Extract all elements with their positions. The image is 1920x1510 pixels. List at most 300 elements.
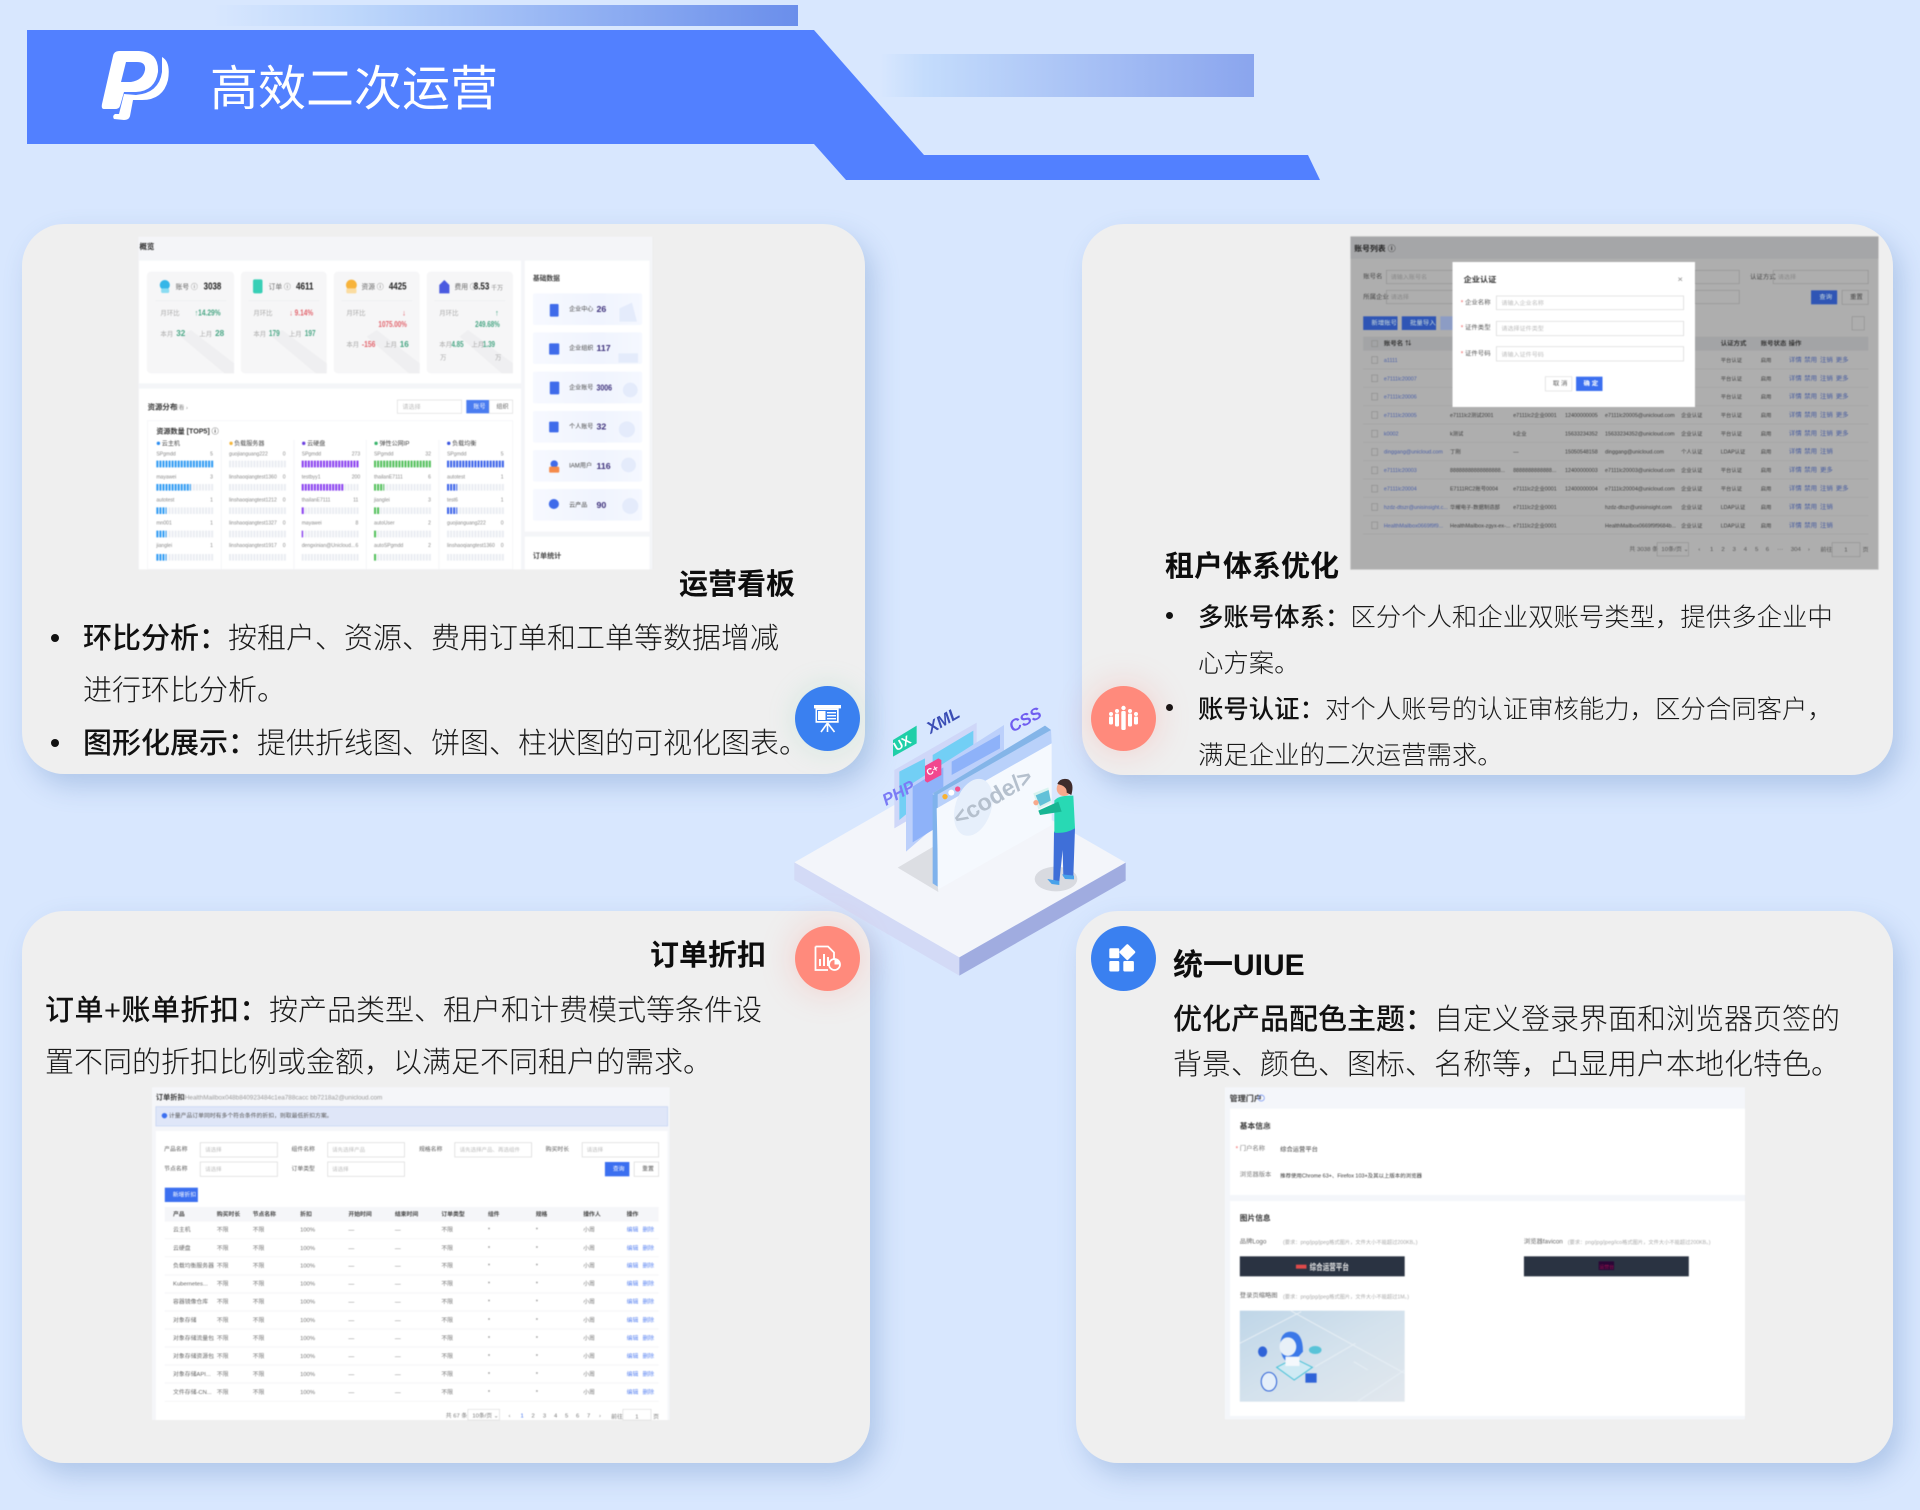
screenshot: order discount table: * — [488, 1282, 491, 1288]
screenshot: portal settings: (要求：png/jpg/jpeg/ico格式图片，文件大小不能超过200KB。) — [1568, 1238, 1711, 1246]
screenshot: dashboard overview: 2 — [428, 543, 431, 549]
screenshot: order discount table: 不限 — [217, 1316, 229, 1324]
screenshot: order discount table: — — [395, 1336, 401, 1342]
screenshot: order discount table: 编辑 — [627, 1336, 638, 1342]
screenshot: account list with modal: 账号名 — [1363, 273, 1382, 281]
screenshot: account list with modal: 企业认证 — [1464, 274, 1496, 284]
screenshot: order discount table: / HealthMailbox048b840923484c1ea788cacc bb7218a2@unicloud.com — [181, 1094, 382, 1101]
screenshot: account list with modal: e7111lc20007 — [1384, 376, 1417, 382]
screenshot: dashboard overview: 0 — [283, 520, 286, 526]
screenshot: order discount table: 前往 — [611, 1412, 623, 1420]
screenshot: dashboard overview: 费用 ⓘ — [454, 282, 477, 291]
screenshot: dashboard overview: 3 — [210, 475, 213, 481]
screenshot: dashboard overview: SPgmdd — [302, 451, 321, 457]
screenshot: account list with modal: e7111lc2企业0001 — [1513, 411, 1557, 419]
screenshot: order discount table: 不限 — [217, 1334, 229, 1342]
screenshot: order discount table: 4 — [554, 1413, 558, 1419]
screenshot: account list with modal: dinggang@unicloud.com — [1384, 450, 1443, 456]
screenshot: order discount table: 2 — [532, 1413, 535, 1419]
screenshot: account list with modal: › — [1808, 547, 1810, 553]
screenshot: order discount table: 不限 — [441, 1262, 453, 1270]
screenshot: portal settings: 浏览器favicon — [1524, 1237, 1563, 1245]
screenshot: dashboard overview: 资源 ⓘ — [362, 282, 384, 291]
screenshot: order discount table: * — [536, 1228, 539, 1234]
screenshot: order discount table: 不限 — [441, 1352, 453, 1360]
screenshot: portal settings: 登录页缩略图 — [1240, 1292, 1278, 1300]
screenshot: dashboard overview: 5 — [501, 451, 504, 457]
screenshot: account list with modal: 禁用 — [1804, 485, 1817, 492]
screenshot: account list with modal: 1 — [1844, 548, 1848, 554]
screenshot: portal settings: 推荐使用Chrome 63+、Firefox 103+及其以上版本的浏览器 — [1280, 1171, 1423, 1179]
screenshot: dashboard overview: 32 — [176, 329, 186, 338]
screenshot: dashboard overview: 0 — [501, 520, 504, 526]
screenshot: order discount table: — — [395, 1354, 401, 1360]
screenshot: account list with modal: 平台认证 — [1721, 356, 1742, 364]
screenshot: order discount table: 组件 — [488, 1210, 500, 1218]
screenshot: order discount table: 编辑 — [627, 1354, 638, 1360]
screenshot: order discount table: * — [488, 1354, 491, 1360]
text: 账号认证 line 1: 账号认证：对个人账号的认证审核能力，区分合同客户， — [1198, 696, 1833, 724]
screenshot: order discount table: * — [536, 1336, 539, 1342]
screenshot: dashboard overview: 本月 — [346, 340, 359, 349]
screenshot: account list with modal: 所属企业 — [1363, 293, 1389, 301]
screenshot: dashboard overview: IAM用户 — [569, 462, 592, 470]
screenshot: dashboard overview: 26 — [596, 304, 606, 314]
screenshot: dashboard overview: 订单 ⓘ — [269, 282, 291, 291]
screenshot: dashboard overview: 订单统计 — [533, 551, 561, 560]
screenshot: account list with modal: 新增账号 — [1371, 319, 1397, 327]
screenshot: dashboard overview: dengxinian@Unicloud... — [302, 543, 355, 549]
screenshot: order discount table: 100% — [300, 1264, 315, 1270]
screenshot: order discount table: 编辑 — [627, 1372, 638, 1378]
screenshot: account list with modal: 启用 — [1761, 356, 1771, 364]
screenshot: order discount table: 对象存储API... — [173, 1370, 211, 1378]
screenshot: dashboard overview — [139, 238, 652, 570]
screenshot: dashboard overview: 1 — [501, 475, 504, 481]
screenshot: order discount table: — — [348, 1372, 354, 1378]
screenshot: dashboard overview: 概览 — [139, 242, 155, 251]
screenshot: order discount table: 订单类型 — [292, 1165, 315, 1173]
screenshot: order discount table: 100% — [300, 1390, 315, 1396]
screenshot: order discount table: 请选择 — [332, 1165, 349, 1173]
screenshot: order discount table: 节点名称 — [164, 1165, 188, 1173]
screenshot: dashboard overview: jianglei — [155, 543, 172, 549]
screenshot: account list with modal: 查询 — [1819, 293, 1832, 301]
screenshot: order discount table: * — [536, 1390, 539, 1396]
screenshot: order discount table: 不限 — [441, 1388, 453, 1396]
screenshot: dashboard overview: 月环比 — [346, 308, 366, 317]
screenshot: dashboard overview: 197 — [305, 329, 316, 338]
screenshot: portal settings: 图片信息 — [1240, 1213, 1271, 1222]
screenshot: order discount table: * — [536, 1246, 539, 1252]
screenshot: dashboard overview: 月环比 — [439, 308, 458, 317]
screenshot: account list with modal: 请选择 — [1778, 273, 1796, 281]
screenshot: dashboard overview: ↑14.29% — [195, 309, 221, 318]
screenshot: account list with modal: * 证件类型 — [1461, 324, 1491, 331]
screenshot: order discount table: 不限 — [217, 1280, 229, 1288]
screenshot: dashboard overview: SPgmdd — [374, 451, 394, 457]
screenshot: account list with modal: 详情 — [1789, 448, 1802, 456]
icon: report document — [795, 926, 860, 991]
screenshot: order discount table: 查询 — [613, 1165, 625, 1173]
screenshot: order discount table: 不限 — [217, 1352, 229, 1360]
screenshot: account list with modal: ··· — [1777, 547, 1783, 553]
screenshot: account list with modal: 禁用 — [1804, 356, 1817, 364]
screenshot: dashboard overview: linshaoqiangtest1360 — [229, 475, 277, 481]
screenshot: dashboard overview: 116 — [596, 461, 611, 471]
screenshot: portal settings: 品牌Logo — [1240, 1237, 1267, 1245]
screenshot: dashboard overview: 0 — [501, 543, 504, 549]
screenshot: order discount table: 组件名称 — [292, 1145, 315, 1153]
screenshot: order discount table: 1 — [521, 1413, 524, 1419]
screenshot: order discount table: 操作 — [627, 1210, 639, 1218]
screenshot: order discount table: 重置 — [642, 1165, 654, 1173]
screenshot: order discount table: 页 — [653, 1413, 659, 1420]
screenshot: order discount table: * — [536, 1282, 539, 1288]
screenshot: account list with modal: 启用 — [1761, 485, 1771, 492]
screenshot: dashboard overview: autoSPgmdd — [374, 543, 403, 549]
screenshot: dashboard overview: SPgmdd — [156, 451, 176, 457]
screenshot: account list with modal: 启用 — [1761, 393, 1771, 401]
screenshot: account list with modal: e7111lc20004 — [1384, 486, 1417, 492]
screenshot: order discount table: 不限 — [253, 1226, 265, 1234]
screenshot: account list with modal: 详情 — [1789, 375, 1802, 382]
screenshot: dashboard overview: 基础数据 — [533, 274, 560, 283]
screenshot: dashboard overview: 2 — [428, 520, 431, 526]
screenshot: account list with modal: 12400000004 — [1565, 486, 1598, 492]
screenshot: account list with modal: 页 — [1862, 547, 1869, 554]
screenshot: dashboard overview: 3038 — [204, 282, 222, 293]
screenshot: order discount table: 100% — [300, 1282, 315, 1288]
screenshot: order discount table: 小周 — [583, 1352, 595, 1360]
screenshot: account list with modal: e7111lc20004@unicloud.com — [1605, 486, 1675, 492]
screenshot: order discount table: 购买时长 — [546, 1145, 569, 1153]
screenshot: account list with modal: 10条/页 ⌄ — [1661, 545, 1689, 553]
screenshot: account list with modal: 更多 — [1820, 466, 1833, 474]
screenshot: account list with modal: 账号列表 ⓘ — [1354, 243, 1396, 253]
screenshot: order discount table: 删除 — [642, 1280, 654, 1288]
screenshot: order discount table: 100% — [300, 1300, 315, 1306]
screenshot: account list with modal: 注销 — [1820, 448, 1833, 456]
screenshot: order discount table: — — [348, 1354, 354, 1360]
central illustration: code platform with person: <code/> — [948, 763, 1037, 831]
icon: presentation board — [795, 686, 860, 751]
text: 环比分析 line 1: 环比分析：按租户、资源、费用订单和工单等数据增减 — [83, 623, 779, 655]
screenshot: order discount table: 新增折扣 — [173, 1190, 196, 1198]
screenshot: dashboard overview: 查看 › — [173, 403, 188, 411]
icon: app grid — [1091, 926, 1156, 991]
screenshot: order discount table: 删除 — [642, 1298, 654, 1306]
screenshot: dashboard overview: 1 — [210, 497, 213, 503]
screenshot: order discount table: 小周 — [583, 1244, 595, 1252]
screenshot: dashboard overview: 1 — [501, 497, 504, 503]
screenshot: account list with modal: 个人认证 — [1681, 448, 1702, 456]
screenshot: dashboard overview: linshaoqiangtest1212 — [229, 497, 277, 503]
screenshot: dashboard overview: 负载服务器 — [234, 439, 264, 447]
screenshot: dashboard overview: 4.85 — [451, 340, 464, 349]
screenshot: order discount table: 请先选择产品 — [332, 1146, 365, 1154]
screenshot: account list with modal: 详情 — [1789, 356, 1802, 364]
screenshot: order discount table: 100% — [300, 1336, 315, 1342]
screenshot: account list with modal: 更多 — [1836, 375, 1849, 382]
screenshot: dashboard overview: 200 — [352, 475, 360, 481]
screenshot: order discount table: 容器镜像仓库 — [173, 1298, 208, 1306]
screenshot: dashboard overview: 1 — [210, 520, 213, 526]
screenshot: dashboard overview: 117 — [596, 343, 611, 353]
screenshot: dashboard overview: 月环比 — [253, 308, 273, 317]
screenshot: dashboard overview: 上月 — [199, 329, 212, 338]
screenshot: portal settings: * 门户名称 — [1236, 1145, 1265, 1153]
screenshot: order discount table: 开始时间 — [348, 1210, 372, 1218]
screenshot: dashboard overview: 云硬盘 — [307, 439, 325, 447]
panel: 租户体系优化 — [1082, 224, 1893, 775]
panel: 订单折扣 — [22, 911, 870, 1463]
screenshot: order discount table: 云主机 — [173, 1226, 191, 1234]
screenshot: order discount table: 编辑 — [627, 1390, 638, 1396]
screenshot: account list with modal: 启用 — [1761, 411, 1771, 419]
screenshot: account list with modal: 更多 — [1836, 485, 1849, 492]
screenshot: dashboard overview: 本月 — [253, 329, 266, 338]
screenshot: account list with modal: 企业认证 — [1681, 411, 1702, 419]
screenshot: order discount table: — — [348, 1300, 354, 1306]
screenshot: account list with modal: 请输入企业名称 — [1501, 299, 1544, 307]
screenshot: order discount table: 不限 — [217, 1244, 229, 1252]
screenshot: dashboard overview: linshaoqiangtest1917 — [229, 543, 277, 549]
screenshot: dashboard overview: 8 — [355, 520, 358, 526]
screenshot: account list with modal — [1350, 236, 1879, 570]
screenshot: order discount table: — — [348, 1318, 354, 1324]
screenshot: account list with modal: 4 — [1744, 547, 1748, 553]
screenshot: dashboard overview: 企业组织 — [569, 344, 593, 352]
screenshot: dashboard overview: 云主机 — [162, 439, 180, 447]
screenshot: dashboard overview: 上月 — [289, 329, 302, 338]
screenshot: order discount table: 不限 — [253, 1388, 265, 1396]
panel: 运营看板 — [22, 224, 865, 774]
screenshot: portal settings: (要求：png/jpg/jpeg格式图片，文件大小不能超过200KB。) — [1283, 1238, 1418, 1246]
screenshot: order discount table: * — [536, 1300, 539, 1306]
screenshot: account list with modal: e7111lc2测试2001 — [1450, 411, 1494, 419]
screenshot: account list with modal: 注销 — [1820, 375, 1833, 382]
screenshot: dashboard overview: 32 — [596, 422, 606, 432]
screenshot: order discount table: 100% — [300, 1228, 315, 1234]
title: 高效二次运营 — [210, 63, 498, 116]
screenshot: dashboard overview: guojianguang222 — [229, 451, 268, 457]
screenshot: account list with modal: 禁用 — [1804, 411, 1817, 419]
screenshot: account list with modal: — — [1513, 450, 1519, 456]
screenshot: account list with modal: 请选择 — [1391, 293, 1409, 301]
screenshot: account list with modal: e7111lc20003@unicloud.com — [1605, 468, 1675, 474]
screenshot: order discount table: 不限 — [253, 1298, 265, 1306]
text: 订单+账单折扣 line 1: 订单+账单折扣：按产品类型、租户和计费模式等条件设 — [45, 995, 762, 1027]
screenshot: dashboard overview: testbyy1 — [302, 475, 321, 481]
screenshot: account list with modal: 304 — [1791, 547, 1802, 553]
screenshot: order discount table: * — [488, 1300, 491, 1306]
screenshot: dashboard overview: 0 — [283, 543, 286, 549]
screenshot: order discount table: 删除 — [642, 1262, 654, 1270]
screenshot: dashboard overview: -156 — [362, 340, 376, 349]
screenshot: account list with modal: e7111lc20005 — [1384, 413, 1417, 419]
screenshot: order discount table: — — [348, 1282, 354, 1288]
screenshot: account list with modal: 更多 — [1836, 430, 1849, 437]
screenshot: order discount table: 云硬盘 — [173, 1244, 191, 1252]
screenshot: account list with modal: 取 消 — [1553, 380, 1567, 388]
screenshot: order discount table: 产品 — [173, 1210, 185, 1218]
screenshot: order discount table: — — [348, 1264, 354, 1270]
screenshot: portal settings: (要求：png/jpg/jpeg格式图片，文件大小不能超过1M。) — [1283, 1292, 1409, 1300]
text: 优化产品配色主题 line 2: 背景、颜色、图标、名称等，凸显用户本地化特色。 — [1173, 1049, 1840, 1081]
screenshot: account list with modal: 账号状态 — [1761, 340, 1787, 347]
screenshot: order discount table: › — [599, 1413, 601, 1419]
screenshot: dashboard overview: 本月 — [439, 340, 452, 349]
screenshot: account list with modal: e7111lc20003 — [1384, 468, 1417, 474]
screenshot: account list with modal: 确 定 — [1584, 380, 1598, 388]
screenshot: portal settings: 综合运营平台 — [1310, 1261, 1349, 1272]
screenshot: order discount table: 6 — [576, 1413, 579, 1419]
screenshot: portal settings — [1225, 1088, 1745, 1419]
screenshot: order discount table: 折扣 — [300, 1210, 312, 1218]
screenshot: dashboard overview: 万 — [440, 353, 446, 361]
screenshot: dashboard overview: linshaoqiangtest1360 — [447, 543, 495, 549]
screenshot: account list with modal: 启用 — [1761, 375, 1771, 382]
screenshot: dashboard overview: ↓ 9.14% — [290, 309, 313, 318]
screenshot: dashboard overview: 上月 — [471, 340, 484, 349]
screenshot: order discount table: 小周 — [583, 1316, 595, 1324]
screenshot: order discount table: 规格 — [536, 1210, 548, 1218]
screenshot: dashboard overview: ↓ — [402, 309, 406, 318]
screenshot: portal settings: 运营台 — [1599, 1263, 1614, 1270]
screenshot: account list with modal: 禁用 — [1804, 393, 1817, 401]
screenshot: order discount table: 删除 — [642, 1316, 654, 1324]
screenshot: dashboard overview: 3 — [428, 497, 431, 503]
screenshot: order discount table: * — [488, 1336, 491, 1342]
screenshot: account list with modal: 批量导入 — [1410, 319, 1436, 327]
screenshot: dashboard overview: 上月 — [384, 340, 397, 349]
screenshot: account list with modal: 1 — [1710, 547, 1713, 553]
screenshot: order discount table: 编辑 — [627, 1300, 638, 1306]
screenshot: account list with modal: k企业 — [1513, 430, 1527, 437]
screenshot: order discount table: — — [395, 1228, 401, 1234]
screenshot: dashboard overview: 企业中心 — [569, 305, 593, 313]
screenshot: order discount table: 不限 — [441, 1334, 453, 1342]
screenshot: order discount table: 负载均衡服务器 — [173, 1262, 214, 1270]
screenshot: order discount table: 不限 — [253, 1244, 265, 1252]
screenshot: order discount table: 编辑 — [627, 1282, 638, 1288]
screenshot: account list with modal: 详情 — [1789, 522, 1802, 529]
screenshot: account list with modal: 平台认证 — [1721, 393, 1742, 401]
screenshot: order discount table: — — [395, 1282, 401, 1288]
screenshot: dashboard overview: 32 — [425, 451, 431, 457]
screenshot: account list with modal: 认证方式 — [1721, 340, 1747, 347]
screenshot: account list with modal: 15633234352@unicloud.com — [1605, 431, 1675, 437]
screenshot: account list with modal: 详情 — [1789, 393, 1802, 401]
screenshot: order discount table: 不限 — [253, 1280, 265, 1288]
screenshot: order discount table: * — [536, 1264, 539, 1270]
screenshot: account list with modal: dinggang@unicloud.com — [1605, 450, 1664, 456]
screenshot: portal settings: 基本信息 — [1240, 1121, 1271, 1130]
text: 多账号体系 line 2: 心方案。 — [1198, 650, 1300, 678]
screenshot: dashboard overview: 企业账号 — [569, 383, 593, 391]
screenshot: account list with modal: 企业认证 — [1681, 466, 1702, 474]
screenshot: account list with modal: 平台认证 — [1721, 375, 1742, 382]
screenshot: dashboard overview: 个人账号 — [569, 422, 593, 430]
header top gradient bar — [213, 5, 798, 26]
screenshot: account list with modal: E7111RC2账号0004 — [1450, 485, 1498, 492]
screenshot: dashboard overview: thailanE7111 — [374, 475, 403, 481]
screenshot: account list with modal: 15050548158 — [1565, 450, 1598, 456]
screenshot: order discount table: 产品名称 — [164, 1145, 188, 1153]
screenshot: account list with modal: 详情 — [1789, 503, 1802, 511]
screenshot: account list with modal: 注销 — [1820, 393, 1833, 401]
screenshot: order discount table: 不限 — [253, 1370, 265, 1378]
screenshot: order discount table: 不限 — [217, 1298, 229, 1306]
text: 环比分析 line 2: 进行环比分析。 — [83, 675, 286, 707]
screenshot: account list with modal: 平台认证 — [1721, 411, 1742, 419]
screenshot: order discount table: 不限 — [253, 1334, 265, 1342]
screenshot: account list with modal: 详情 — [1789, 466, 1802, 474]
screenshot: account list with modal: LDAP认证 — [1721, 503, 1745, 511]
screenshot: portal settings: 浏览器版本 — [1240, 1171, 1271, 1179]
text: 订单+账单折扣 line 2: 置不同的折扣比例或金额，以满足不同租户的需求。 — [45, 1047, 712, 1079]
screenshot: order discount table: 编辑 — [627, 1246, 638, 1252]
screenshot: account list with modal: 前往 — [1820, 546, 1833, 554]
screenshot: dashboard overview: 千万 — [491, 284, 503, 292]
screenshot: account list with modal: 重置 — [1850, 293, 1863, 301]
screenshot: dashboard overview: 8.53 — [474, 282, 490, 293]
screenshot: order discount table: — — [348, 1390, 354, 1396]
screenshot: order discount table: 100% — [300, 1372, 315, 1378]
screenshot: dashboard overview: 1.39 — [483, 340, 495, 349]
screenshot: order discount table: 删除 — [642, 1244, 654, 1252]
screenshot: account list with modal: e7111lc20005@unicloud.com — [1605, 413, 1675, 419]
screenshot: order discount table: 小周 — [583, 1370, 595, 1378]
screenshot: order discount table: * — [488, 1390, 491, 1396]
screenshot: order discount table: 小周 — [583, 1280, 595, 1288]
screenshot: order discount table: — — [395, 1246, 401, 1252]
screenshot: account list with modal: 启用 — [1761, 466, 1771, 474]
screenshot: order discount table: 不限 — [441, 1370, 453, 1378]
screenshot: order discount table: 文件存储-CN... — [173, 1388, 212, 1396]
screenshot: account list with modal: 启用 — [1761, 522, 1771, 529]
screenshot: dashboard overview: mayawei — [302, 520, 322, 526]
screenshot: dashboard overview: 云产品 — [569, 501, 587, 509]
screenshot: dashboard overview: 4611 — [296, 282, 314, 293]
screenshot: order discount table: — — [348, 1336, 354, 1342]
screenshot: account list with modal: 注销 — [1820, 485, 1833, 492]
screenshot: order discount table: * — [488, 1246, 491, 1252]
bullet — [1166, 704, 1173, 711]
screenshot: order discount table: 小周 — [583, 1388, 595, 1396]
screenshot: account list with modal: ‹ — [1698, 547, 1700, 553]
screenshot: account list with modal: * 证件号码 — [1461, 350, 1491, 358]
screenshot: dashboard overview: 273 — [352, 451, 360, 457]
screenshot: order discount table: — — [348, 1246, 354, 1252]
screenshot: account list with modal: 丁刚 — [1450, 448, 1461, 456]
screenshot: dashboard overview: autotest — [447, 475, 466, 481]
screenshot: account list with modal: × — [1678, 274, 1683, 284]
screenshot: dashboard overview: 0 — [283, 497, 286, 503]
screenshot: account list with modal: 12400000003 — [1565, 468, 1598, 474]
icon: logo — [102, 51, 169, 120]
screenshot: order discount table: 10条/页 ⌄ — [472, 1411, 499, 1419]
screenshot: account list with modal: 认证方式 — [1750, 273, 1776, 281]
screenshot: order discount table: 共 67 条 — [446, 1411, 468, 1419]
screenshot: order discount table: 不限 — [217, 1370, 229, 1378]
screenshot: dashboard overview: 4425 — [389, 282, 407, 293]
screenshot: account list with modal: 详情 — [1789, 485, 1802, 492]
bullet — [1166, 612, 1173, 619]
screenshot: dashboard overview: mayawei — [156, 475, 176, 481]
screenshot: account list with modal: 更多 — [1836, 411, 1849, 419]
